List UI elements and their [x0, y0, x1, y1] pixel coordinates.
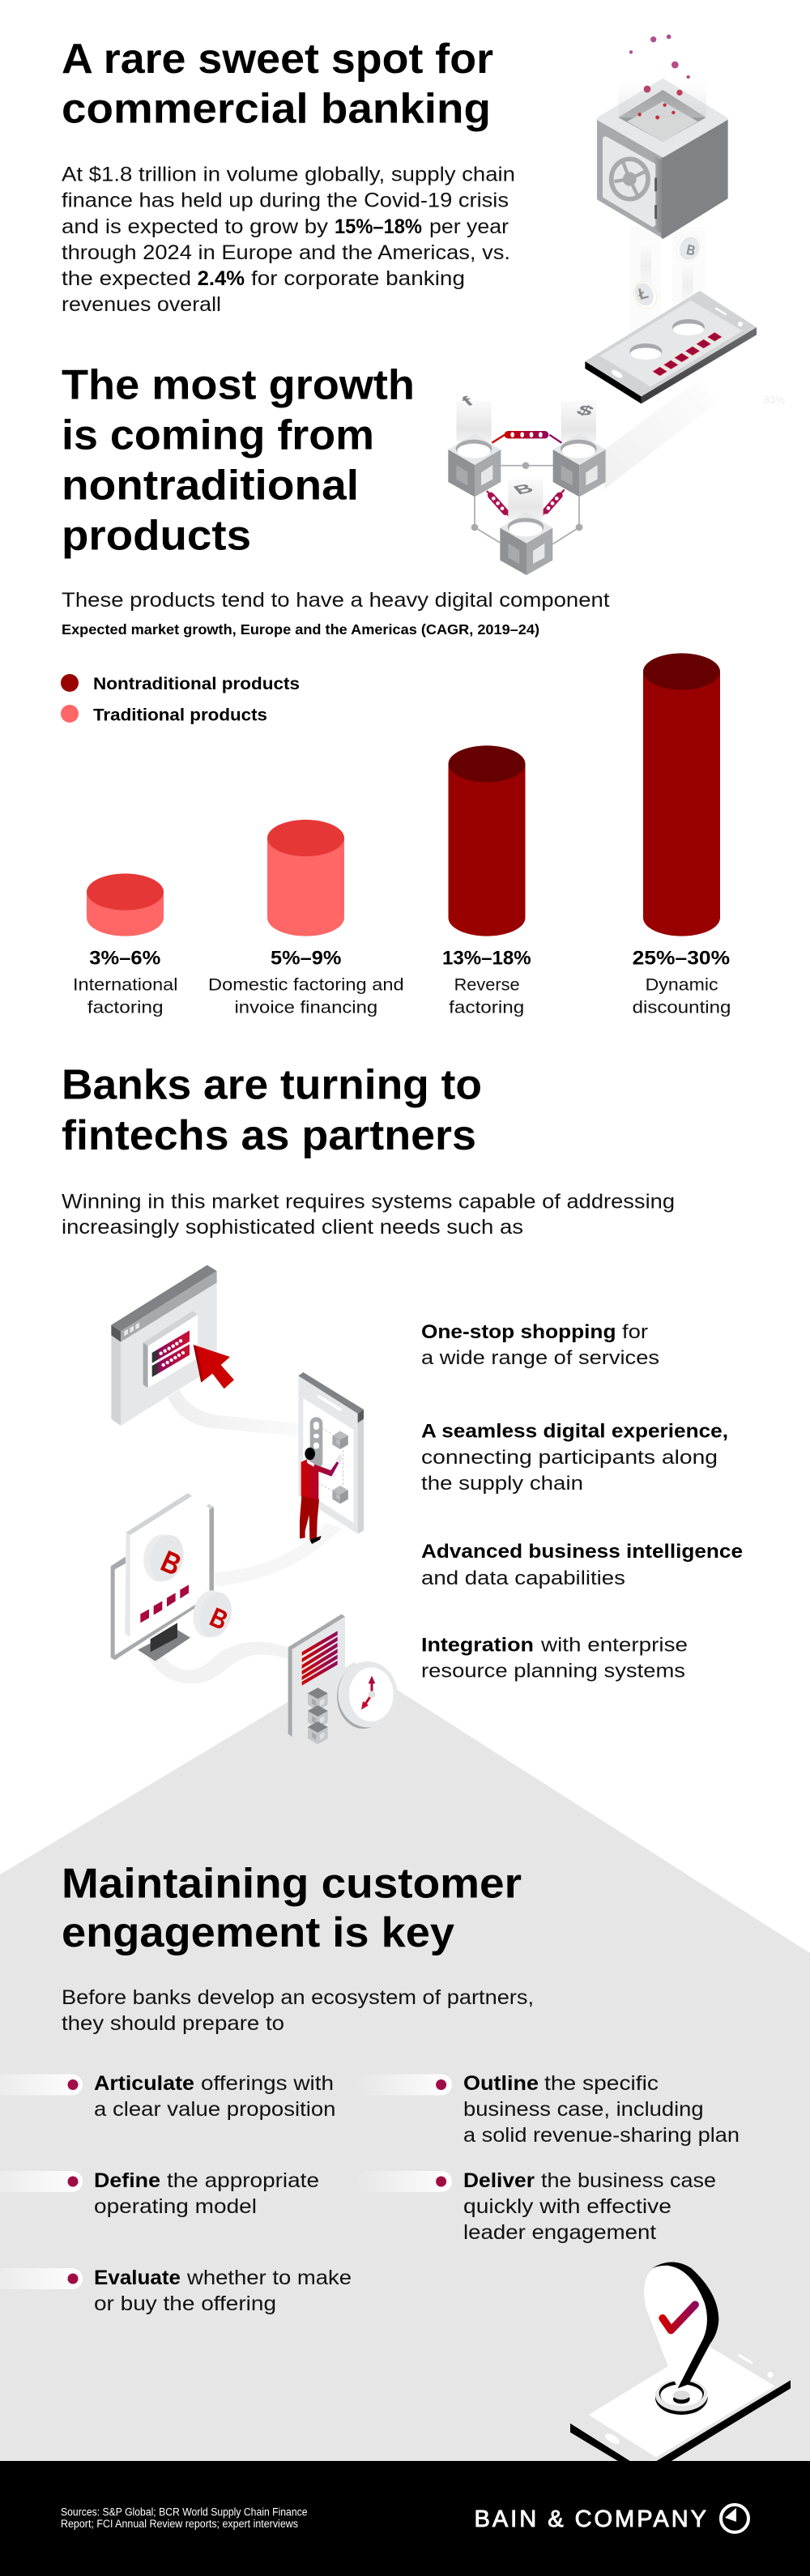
list: preparation steps [0, 2072, 740, 2315]
footer: sources: Sources: S&P Global; BCR World Supply Chain Finance [61, 2506, 308, 2518]
heading: most growth: nontraditional [62, 463, 359, 510]
intro paragraph: and is expected to grow by [62, 215, 329, 238]
list: client needs: resource planning systems [421, 1661, 685, 1683]
heading: fintechs [62, 1062, 482, 1159]
faint watermark: 83% [764, 394, 785, 406]
chart labels: 3%–6% [89, 948, 160, 970]
intro: client needs: increasingly sophisticated client needs such as [62, 1216, 523, 1239]
intro paragraph: for corporate banking [251, 267, 465, 290]
icon: diagonal band to network [604, 381, 717, 489]
icon: blockchain network of cubes: B [510, 481, 537, 497]
chart labels: International [73, 975, 178, 995]
intro paragraph [62, 164, 515, 316]
footer band [0, 2461, 810, 2576]
list: preparation steps: Define [94, 2169, 160, 2192]
list: preparation steps: quickly with effective [463, 2195, 671, 2218]
heading: fintechs: fintechs as partners [62, 1112, 476, 1159]
intro: before banks: they should prepare to [62, 2012, 284, 2035]
intro: before banks: Before banks develop an ecosystem of partners, [62, 1986, 534, 2009]
chart labels: factoring [449, 998, 524, 1017]
icon: falling coins [630, 231, 704, 312]
intro: client needs: Winning in this market requires systems capable of addressing [62, 1191, 675, 1213]
chart labels: factoring [87, 998, 164, 1017]
title: A rare sweet spot for [62, 36, 493, 83]
icon: blockchain network of cubes: f [458, 394, 478, 409]
list: client needs: Advanced business intelligence [421, 1541, 743, 1563]
legend: Nontraditional products [93, 675, 300, 693]
list: client needs: connecting participants along [421, 1447, 718, 1469]
legend [61, 674, 300, 724]
list: preparation steps: Deliver [463, 2169, 535, 2192]
list: preparation steps: Outline [463, 2072, 539, 2095]
heading: most growth: The most growth [62, 362, 415, 409]
footer: sources: Report; FCI Annual Review reports; expert interviews [61, 2518, 298, 2530]
list: client needs: Integration [421, 1635, 534, 1657]
legend: Traditional products [93, 706, 267, 724]
heading: most growth: products [62, 513, 251, 560]
chart labels: discounting [633, 998, 731, 1017]
intro paragraph: per year [429, 215, 509, 238]
heading: customer engagement [62, 1860, 522, 1956]
intro paragraph: the expected [62, 267, 191, 290]
chart labels: Reverse [454, 975, 520, 995]
intro paragraph: 15%–18% [335, 215, 422, 238]
chart labels: Domestic factoring and [208, 975, 404, 995]
intro paragraph: revenues overall [62, 293, 221, 316]
title [62, 36, 493, 133]
list: client needs: a wide range of services [421, 1347, 659, 1369]
ribbon connectors [148, 1390, 342, 1683]
list: preparation steps: leader engagement [463, 2221, 656, 2244]
icon: vault safe with dots [599, 34, 727, 237]
list: client needs [421, 1321, 743, 1683]
list: preparation steps: a solid revenue-sharing plan [463, 2124, 740, 2147]
intro paragraph: 2.4% [198, 267, 245, 290]
title: commercial banking [62, 86, 491, 133]
icon: monitor with bitcoin coins: B [206, 1602, 232, 1636]
icon: blockchain network of cubes [448, 394, 606, 575]
intro: client needs [62, 1191, 675, 1239]
intro: before banks [62, 1986, 534, 2035]
list: preparation steps: offerings with [201, 2072, 334, 2095]
icon: monitor with bitcoin coins [111, 1493, 237, 1661]
subheading: digital component: These products tend to have a heavy digital component [62, 589, 610, 612]
chart labels: 5%–9% [271, 948, 341, 970]
heading: most growth: is coming from [62, 412, 374, 459]
list: preparation steps: Evaluate [94, 2267, 181, 2289]
list: preparation steps: Articulate [94, 2072, 194, 2095]
chart labels [73, 948, 731, 1017]
icon: falling coins: Ł [637, 285, 650, 304]
gray background panel [0, 1662, 810, 2463]
icon: browser window with cursor [111, 1265, 234, 1426]
chart labels: invoice financing [235, 998, 377, 1017]
heading: most growth [62, 362, 415, 560]
intro paragraph: through 2024 in Europe and the Americas, vs. [62, 241, 510, 264]
icon: ERP document with clock [288, 1614, 398, 1744]
list: client needs: A seamless digital experience, [421, 1421, 728, 1442]
list: client needs: with enterprise [540, 1635, 688, 1657]
icon: monitor with bitcoin coins: B [156, 1545, 186, 1583]
intro paragraph: At $1.8 trillion in volume globally, supply chain [62, 164, 515, 186]
intro paragraph: finance has held up during the Covid-19 crisis [62, 190, 509, 212]
footer: Bain &amp; Company logo: BAIN & COMPANY [475, 2506, 706, 2532]
chart labels: Dynamic [646, 975, 718, 995]
list: preparation steps: operating model [94, 2195, 257, 2218]
chart title: Expected market growth, Europe and the Americas (CAGR, 2019–24) [62, 621, 539, 638]
list: preparation steps: or buy the offering [94, 2292, 276, 2315]
list: client needs: One-stop shopping [421, 1321, 616, 1343]
list: preparation steps: the specific [544, 2072, 659, 2095]
icon: smartphone with tiles [585, 291, 757, 403]
icon: mobile screen with person [298, 1372, 364, 1544]
footer: sources [61, 2506, 308, 2530]
icon: coin columns below the safe [629, 227, 705, 335]
bar chart: cylinders [87, 653, 720, 936]
icon: blockchain network of cubes: $ [573, 402, 598, 419]
chart labels: 13%–18% [442, 948, 531, 970]
icon: falling coins: B [685, 242, 697, 259]
list: client needs: and data capabilities [421, 1567, 625, 1589]
list: client needs: the supply chain [421, 1473, 583, 1495]
list: preparation steps: a clear value proposition [94, 2098, 336, 2121]
chart labels: 25%–30% [633, 948, 730, 970]
heading: fintechs: Banks are turning to [62, 1062, 482, 1109]
list: preparation steps: the business case [541, 2169, 716, 2192]
list: preparation steps: the appropriate [167, 2169, 319, 2192]
list: preparation steps: whether to make [186, 2267, 352, 2289]
heading: customer engagement: engagement is key [62, 1909, 454, 1956]
list: client needs: for [622, 1321, 648, 1343]
icon: phone with map pin and check [570, 2262, 791, 2461]
heading: customer engagement: Maintaining customer [62, 1860, 522, 1907]
list: preparation steps: business case, including [463, 2098, 704, 2121]
